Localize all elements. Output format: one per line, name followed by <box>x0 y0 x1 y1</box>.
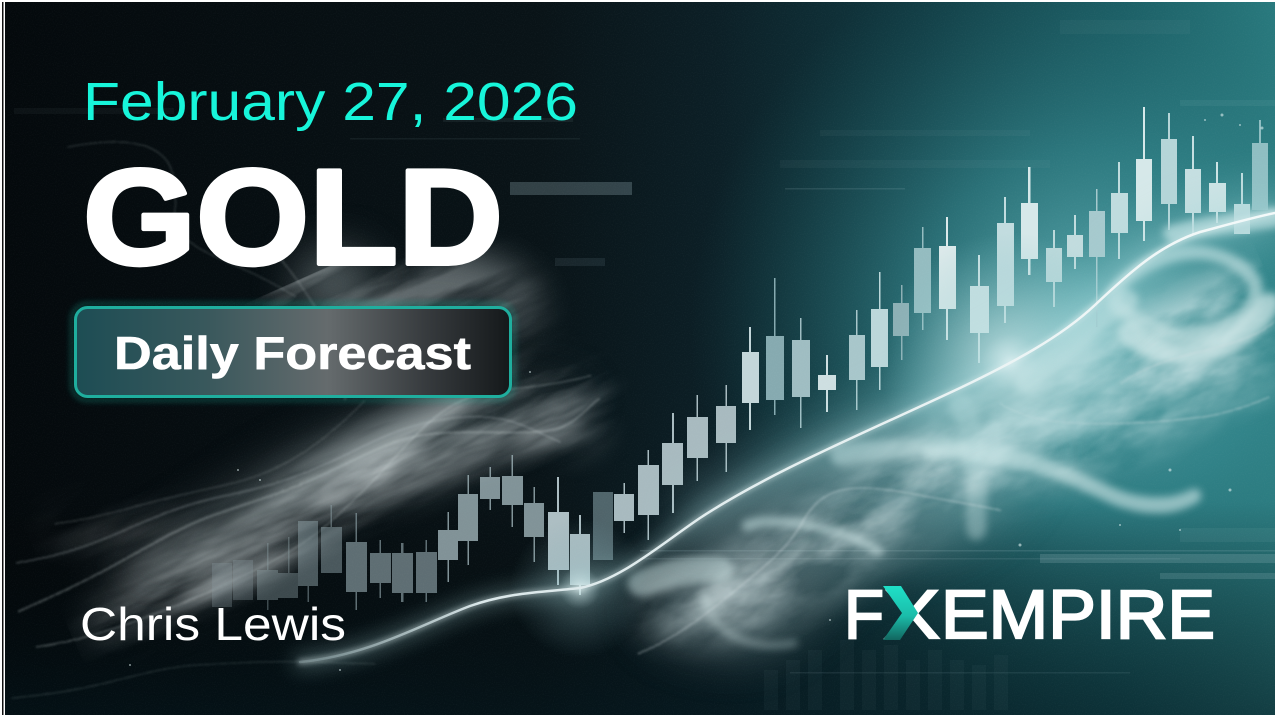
horizontal data streaks <box>14 100 1275 674</box>
candlestick chart: upper-right series <box>742 107 1268 430</box>
smoke stream: left <box>52 242 616 652</box>
badge label: Daily Forecast <box>114 327 471 379</box>
glowing trend line <box>300 213 1275 662</box>
smoke stream: right <box>634 258 1275 654</box>
date heading: February 27, 2026 <box>83 72 578 132</box>
glow around the trend line <box>892 248 1097 463</box>
candlestick chart: lower-left series <box>212 385 736 610</box>
asset title: GOLD: GOLD <box>83 141 503 293</box>
dim background volume bars <box>764 640 1008 710</box>
logo: FXEMPIRE: X <box>884 576 940 653</box>
fine smoke wisps <box>10 147 1270 690</box>
diffuse smoke haze <box>140 253 1040 653</box>
left frame edge line <box>2 2 4 715</box>
logo: FXEMPIRE: EMPIRE <box>941 576 1215 653</box>
icon: teal chevron <box>883 586 918 640</box>
panel: Daily Forecast badge <box>72 304 514 400</box>
logo: FXEMPIRE: F <box>844 576 884 653</box>
presenter name: Chris Lewis <box>80 598 346 650</box>
scattered specks <box>129 114 1264 671</box>
film grain <box>18 11 644 697</box>
smoke ribbons: right <box>640 222 1275 642</box>
